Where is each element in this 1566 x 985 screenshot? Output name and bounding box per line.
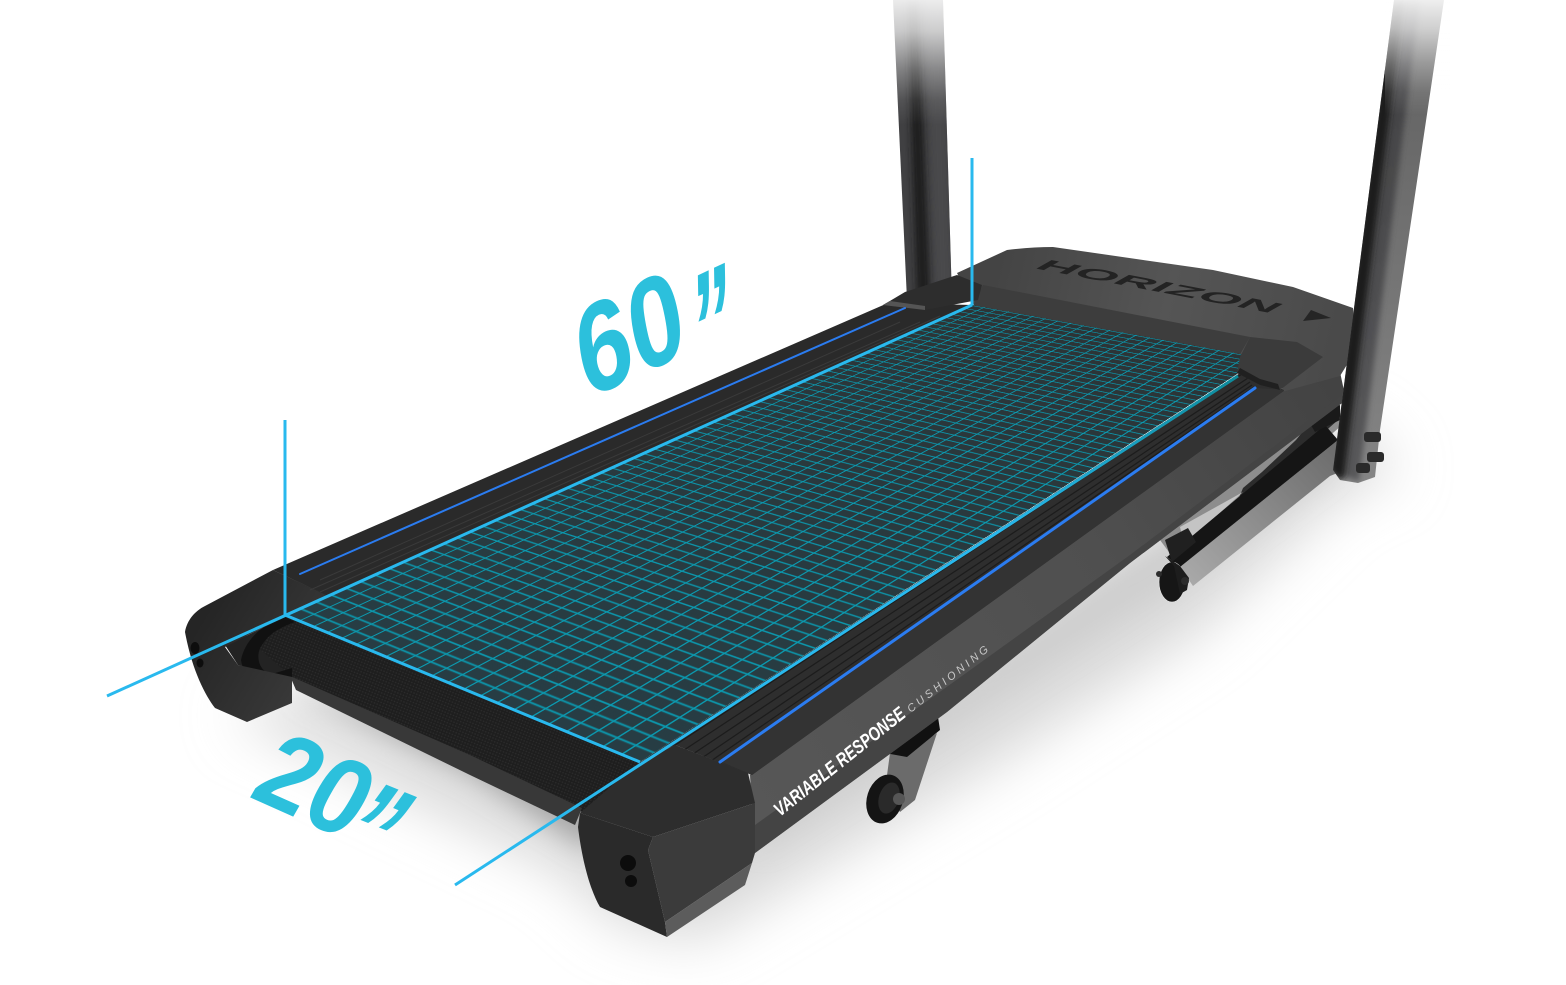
pole base plate <box>883 275 982 310</box>
dimension label: 20 inches: 20 <box>235 710 396 861</box>
cap top <box>580 745 755 837</box>
right side panel <box>750 372 1346 853</box>
bolts <box>1356 432 1384 473</box>
cap side <box>648 803 755 922</box>
front wheel assembly <box>860 717 940 828</box>
dimension label: 20 inches: ” <box>297 756 442 913</box>
left end cap <box>185 570 333 722</box>
left upright <box>893 0 952 292</box>
brand text: variable response cushioning: VARIABLE RESPONSE <box>770 703 911 821</box>
right rail <box>640 372 1285 775</box>
rear right corner piece <box>1237 337 1323 390</box>
cap front <box>578 813 667 937</box>
dimension label: 60 inches: 60 <box>565 241 695 427</box>
cap lower chamfer <box>665 863 752 937</box>
rear grey plate <box>1180 440 1345 586</box>
hood arrow mark <box>1303 310 1331 321</box>
under-deck fill <box>1160 400 1342 567</box>
right upright <box>1329 0 1450 483</box>
left rail <box>273 303 972 597</box>
rear wheel <box>1156 556 1189 602</box>
dimension label: 20 inches <box>235 710 442 913</box>
black crossbar <box>1167 425 1338 567</box>
brand text: variable response cushioning <box>770 638 992 821</box>
rear frame <box>1156 400 1345 602</box>
rear hood <box>957 247 1356 391</box>
brand text: horizon: HORIZON <box>1028 257 1291 316</box>
floor shadow <box>230 420 1400 940</box>
right end cap <box>578 745 755 937</box>
blue accent lines <box>300 308 1255 762</box>
dimension lines <box>107 158 1238 885</box>
belt grid <box>285 305 1262 762</box>
brand text: variable response cushioning: CUSHIONING <box>905 643 991 715</box>
belt front roller <box>225 615 640 825</box>
hood front slope <box>973 285 1250 358</box>
under-deck brackets <box>1236 405 1338 505</box>
dimension label: 60 inches: ” <box>691 225 733 426</box>
